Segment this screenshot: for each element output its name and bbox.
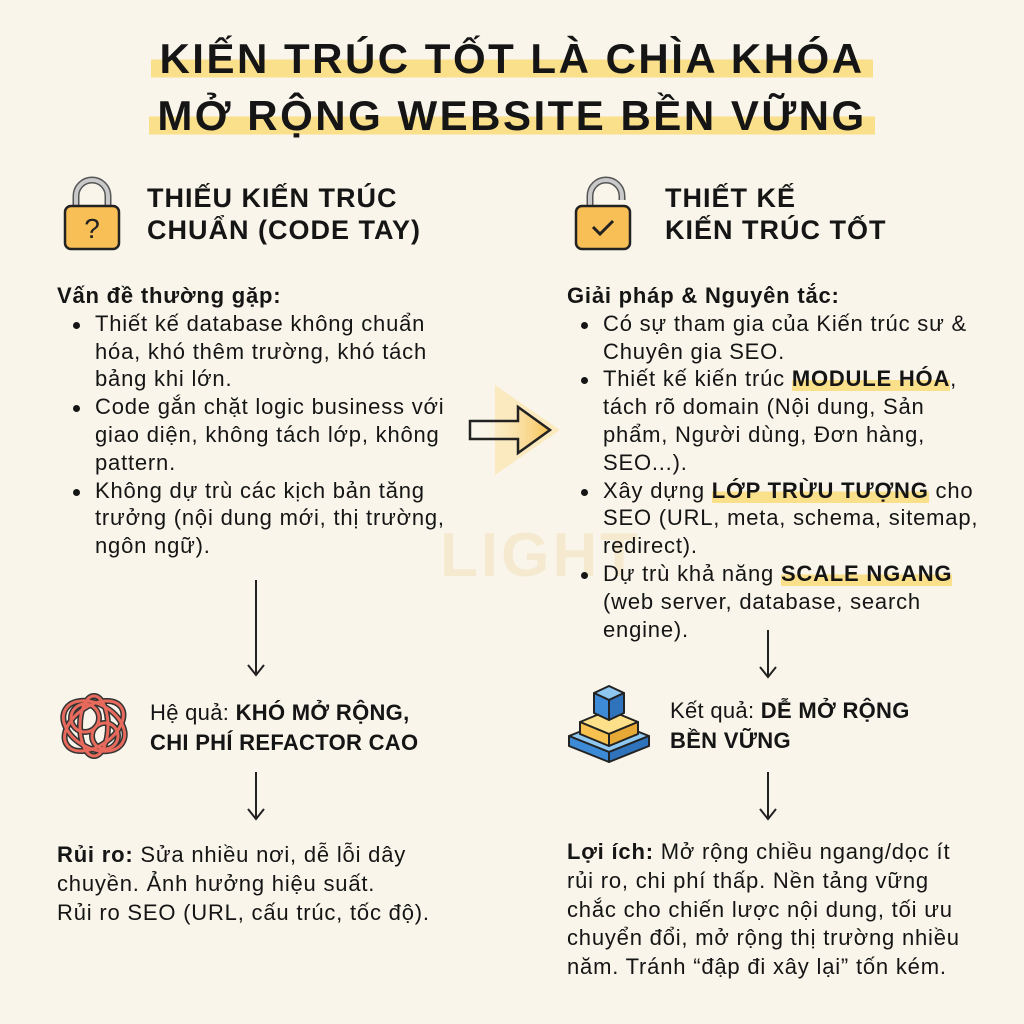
text: solutions: (web server, database, search [603,589,921,614]
text: problems: pattern. [95,450,176,475]
text: solutions: Giải pháp & Nguyên tắc: [567,283,840,308]
text: problems: Không dự trù các kịch bản tăng [95,478,425,503]
text: risk: Rủi ro SEO (URL, cấu trúc, tốc độ). [57,900,430,925]
heading: left [147,183,421,245]
text: risk: chuyền. Ảnh hưởng hiệu suất. [57,871,375,896]
text: solutions: phẩm, Người dùng, Đơn hàng, [603,422,925,447]
text: solutions: SEO (URL, meta, schema, sitemap, [603,505,978,530]
text: result: Kết quả: DỄ MỞ RỘNG [670,698,910,723]
heading: left: THIẾU KIẾN TRÚC [147,183,398,213]
text: solutions: Xây dựng LỚP TRỪU TƯỢNG cho [603,478,973,503]
title [149,35,875,139]
icon: stacked cubes [568,685,650,763]
arrow: right down 1 [759,630,777,678]
heading: left: CHUẨN (CODE TAY) [147,215,421,245]
text: benefit: Lợi ích: Mở rộng chiều ngang/dọc ít [567,839,950,864]
icon: question lock [64,176,120,250]
text: problems [57,283,445,558]
arrow: right down 2 [759,772,777,820]
text: solutions: Thiết kế kiến trúc MODULE HÓA, [603,366,957,391]
arrow: left down 1 [247,580,265,676]
text: benefit [567,839,960,979]
text: risk [57,842,430,925]
text: benefit: năm. Tránh “đập đi xây lại” tốn kém. [567,954,947,979]
text: consequence: Hệ quả: KHÓ MỞ RỘNG, [150,700,410,725]
text: problems: hóa, khó thêm trường, khó tách [95,339,427,364]
text: problems: Code gắn chặt logic business với [95,394,444,419]
text: result: BỀN VỮNG [670,728,791,753]
text: problems: ngôn ngữ). [95,533,211,558]
text: problems: bảng khi lớn. [95,366,232,391]
text: solutions: engine). [603,617,689,642]
text: consequence [150,700,418,755]
icon: tangle [60,693,128,759]
text: result [670,698,910,753]
text: problems: giao diện, không tách lớp, không [95,422,440,447]
text: problems: trưởng (nội dung mới, thị trường, [95,505,445,530]
text: consequence: CHI PHÍ REFACTOR CAO [150,730,418,755]
text: problems: Thiết kế database không chuẩn [95,311,425,336]
text: benefit: chắc cho chiến lược nội dung, tối ưu [567,897,953,922]
text: solutions: redirect). [603,533,698,558]
text: problems: Vấn đề thường gặp: [57,283,281,308]
text: solutions [567,283,978,642]
text: benefit: chuyển đổi, mở rộng thị trường nhiều [567,925,960,950]
text: benefit: rủi ro, chi phí thấp. Nền tảng vững [567,868,929,893]
text: solutions: Có sự tham gia của Kiến trúc sư & [603,311,967,336]
text: solutions: Chuyên gia SEO. [603,339,785,364]
text: solutions: tách rõ domain (Nội dung, Sản [603,394,925,419]
text: risk: Rủi ro: Sửa nhiều nơi, dễ lỗi dây [57,842,406,867]
title: KIẾN TRÚC TỐT LÀ CHÌA KHÓA [159,35,865,82]
icon: question lock: ? [84,213,100,244]
heading: right: THIẾT KẾ [665,183,796,213]
arrow: left down 2 [247,772,265,820]
text: solutions: SEO...). [603,450,688,475]
text: solutions: Dự trù khả năng SCALE NGANG [603,561,952,586]
heading: right: KIẾN TRÚC TỐT [665,215,886,245]
icon: open lock [574,176,632,250]
title: MỞ RỘNG WEBSITE BỀN VỮNG [157,92,867,139]
watermark: LIGHT [440,521,641,590]
arrow: middle [468,385,560,475]
heading: right [665,183,886,245]
